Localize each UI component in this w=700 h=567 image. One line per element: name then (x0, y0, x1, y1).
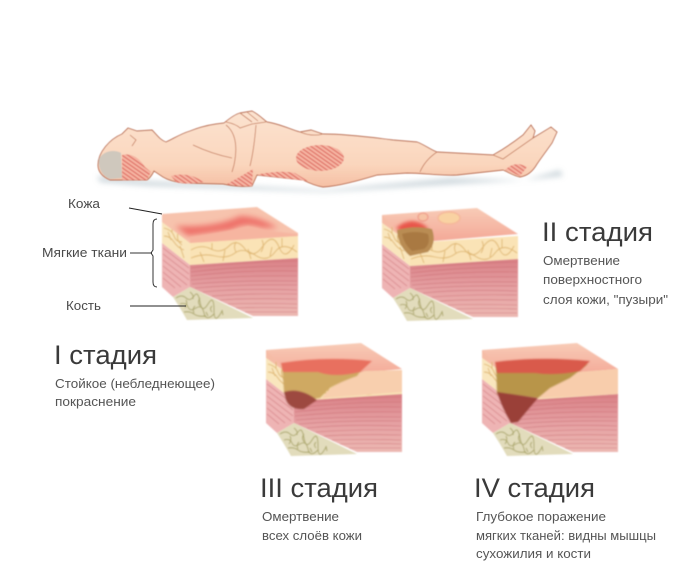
top surface (382, 208, 518, 243)
crater (397, 227, 434, 256)
hair (99, 151, 122, 179)
slough layer (496, 364, 588, 398)
pressure zone: elbow (227, 169, 253, 186)
body outline (98, 111, 557, 187)
red wound rim (281, 359, 372, 375)
stage III description (262, 510, 362, 543)
body details (130, 112, 533, 172)
exposed fat arc (538, 369, 618, 398)
pressure zone: shoulder blade (171, 174, 204, 184)
stage III heading: III стадия (260, 473, 378, 503)
stage I description: Стойкое (небледнеющее) (55, 377, 215, 391)
stage III description: Омертвение (262, 510, 339, 524)
stage II heading: II стадия (542, 217, 653, 247)
top surface (482, 343, 618, 378)
stage II description (543, 254, 668, 307)
stage IV description: мягких тканей: видны мышцы (476, 529, 656, 543)
label: bone (66, 299, 186, 313)
stage IV description: Глубокое поражение (476, 510, 606, 524)
label: skin (68, 197, 162, 214)
blisters (438, 212, 460, 224)
deep tissue reaching bone (497, 392, 538, 423)
stage III cube (266, 343, 402, 456)
stage II cube (382, 208, 518, 321)
pressure zone: sacrum (258, 172, 308, 181)
stage I description: покраснение (55, 395, 136, 409)
label: soft tissue with bracket: Мягкие ткани (42, 246, 127, 260)
pressure zone: head (122, 154, 151, 180)
label: soft tissue with bracket (42, 219, 157, 287)
body shadow (97, 170, 563, 192)
slough layer (282, 364, 366, 402)
stage II description: Омертвение (543, 254, 620, 268)
stage I cube (162, 207, 298, 320)
stage III description: всех слоёв кожи (262, 529, 362, 543)
top surface with redness (162, 207, 298, 243)
pressure zone: hip (296, 145, 344, 171)
stage IV heading: IV стадия (474, 473, 595, 503)
pressure zone: heel (505, 164, 527, 176)
stage IV description: сухожилия и кости (476, 547, 591, 561)
stage IV cube (482, 343, 618, 456)
stage IV description (476, 510, 656, 561)
stage I description (55, 377, 215, 409)
stage II description: поверхностного (543, 273, 642, 287)
deep tissue (284, 391, 317, 409)
label: bone: Кость (66, 299, 101, 313)
top surface (266, 343, 402, 378)
red wound rim (495, 359, 590, 374)
label: skin: Кожа (68, 197, 100, 211)
stage I heading: I стадия (54, 340, 157, 370)
stage II description: слоя кожи, "пузыри" (543, 293, 668, 307)
exposed fat arc (322, 370, 402, 398)
illustration: patient lying on back with pressure areas (97, 111, 563, 192)
